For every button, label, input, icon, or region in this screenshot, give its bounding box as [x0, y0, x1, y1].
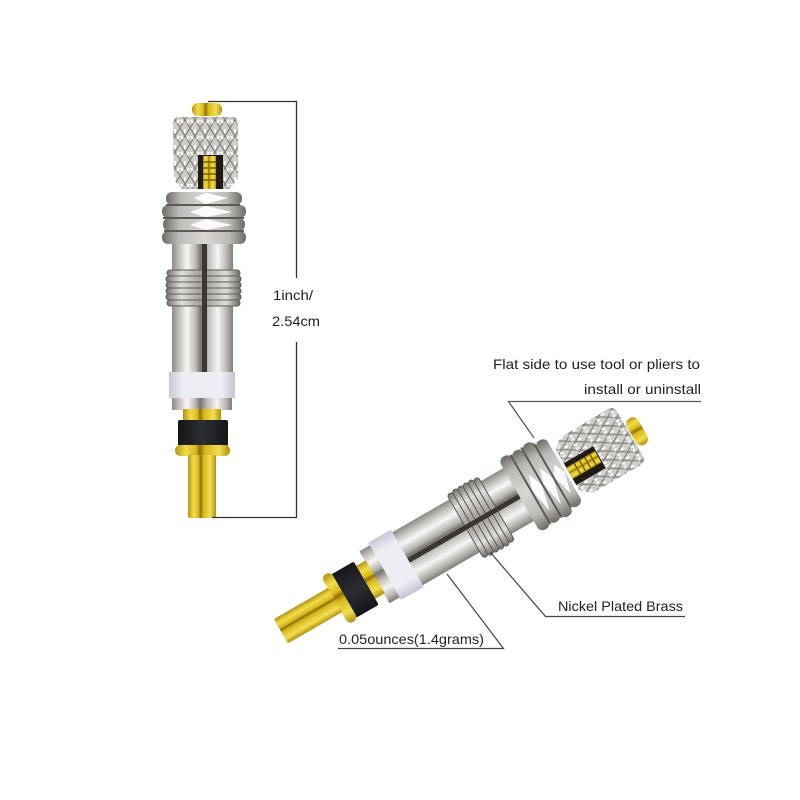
height label: 1inch/	[273, 287, 313, 303]
vertical valve core	[162, 103, 246, 518]
callout: flat side	[493, 356, 701, 438]
callout: nickel plated brass	[490, 552, 685, 616]
height label: 2.54cm	[272, 313, 320, 329]
angled valve core	[261, 389, 662, 669]
callout: weight	[338, 574, 504, 648]
callout: flat side: install or uninstall	[584, 381, 701, 397]
height label	[272, 287, 320, 329]
height dimension bracket	[208, 102, 296, 518]
callout: flat side: Flat side to use tool or pliers to	[493, 356, 700, 372]
callout: nickel plated brass: Nickel Plated Brass	[558, 598, 683, 614]
callout: weight: 0.05ounces(1.4grams)	[339, 631, 484, 647]
